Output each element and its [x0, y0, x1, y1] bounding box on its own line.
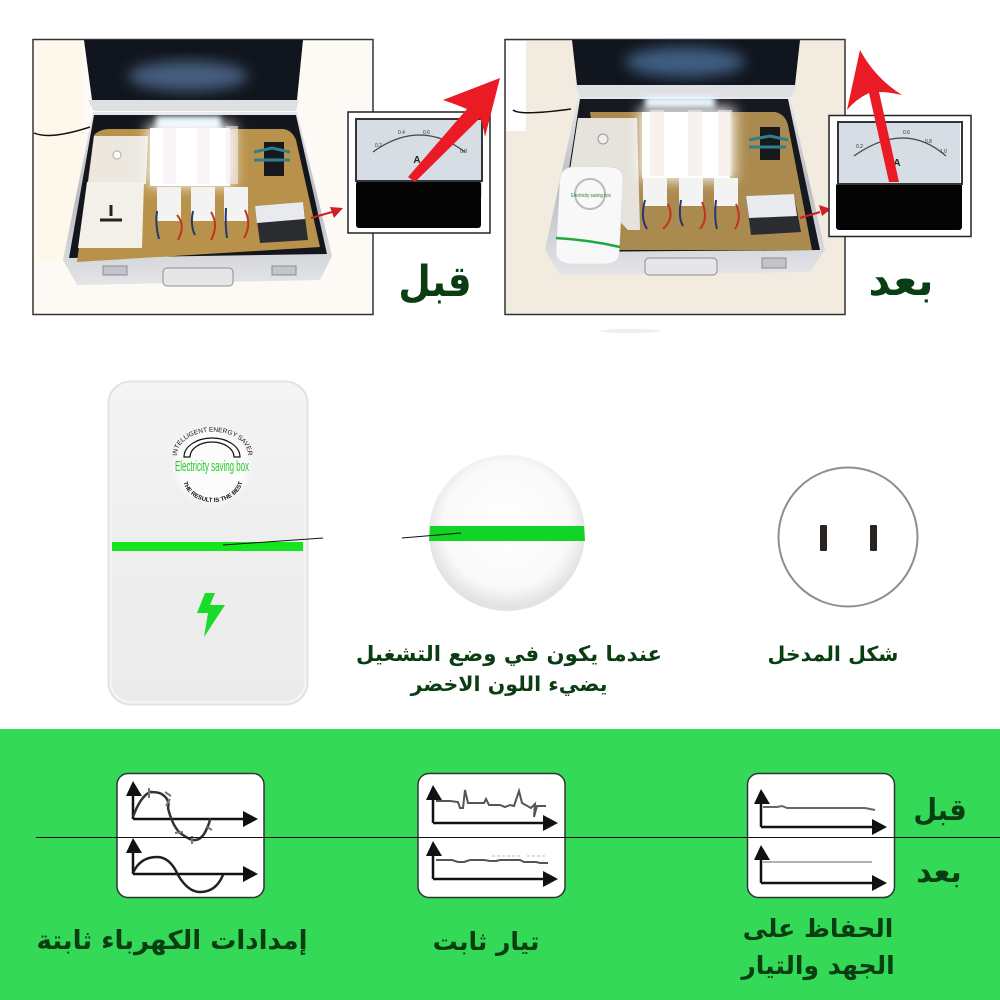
after: white energy saver on case [556, 166, 623, 264]
panel: after ammeter zoom: 0.2 [856, 144, 863, 150]
text: maintaining voltage and current: الحفاظ على [743, 914, 893, 943]
panel: after ammeter zoom: 1.0 [940, 149, 947, 155]
smudge below photos [600, 329, 660, 333]
icon: light close-up circle [402, 455, 585, 611]
panel: after ammeter zoom: 0.6 [903, 130, 910, 136]
panel: before ammeter zoom: 0.2 [375, 143, 382, 149]
text: maintaining voltage and current [739, 914, 895, 981]
before: terminal block [254, 142, 290, 176]
device logo [172, 427, 252, 502]
before: small ammeter [255, 202, 308, 243]
label: after row: بعد [916, 855, 962, 890]
before: wall socket [78, 182, 144, 248]
arrow: before big red arrow [408, 78, 500, 182]
panel: before ammeter zoom: 0.8 [460, 149, 467, 155]
before: glowing lamps [148, 124, 238, 186]
panel: before ammeter zoom: 0.4 [398, 130, 405, 136]
device logo: INTELLIGENT ENERGY SAVER [172, 427, 252, 456]
before: wall switch box [88, 136, 148, 184]
text: stable power supply: إمدادات الكهرباء ثابتة [36, 926, 308, 956]
after: case handle and latches [645, 258, 786, 275]
after: small red arrow [800, 205, 831, 218]
label: before row: قبل [913, 792, 967, 827]
device: energy saver front view [108, 380, 308, 706]
chart: stable current waveforms [418, 774, 565, 898]
before: lamp holders and wires [156, 187, 248, 240]
arrow: after big red arrow [847, 50, 902, 182]
before: case handle and latches [103, 266, 296, 286]
panel: after ammeter zoom [829, 116, 971, 236]
callout line between device and light close-up [223, 538, 323, 545]
panel: green comparison band [0, 729, 1000, 1000]
after: lamp holders and wires [643, 178, 739, 229]
panel: before ammeter zoom: 0.6 [423, 130, 430, 136]
before: small red arrow [311, 207, 343, 218]
heading: after: بعد [868, 256, 934, 306]
after: white energy saver on case: Electricity saving box [571, 193, 611, 199]
device logo: THE RESULT IS THE BEST [184, 481, 242, 502]
panel: before ammeter zoom [348, 112, 490, 233]
after: terminal block [749, 127, 788, 160]
text: socket label: شكل المدخل [768, 642, 898, 666]
panel: before ammeter zoom: A [413, 155, 421, 166]
icon: socket shape [778, 468, 918, 606]
divider line across charts [36, 836, 1000, 838]
text: maintaining voltage and current: الجهد والتيار [739, 951, 895, 981]
after: small ammeter [746, 194, 801, 235]
chart: power supply waveforms [117, 774, 264, 898]
after: wall switch box [570, 118, 640, 230]
text: light description: يضيء اللون الاخضر [410, 672, 607, 696]
device green light bar [112, 542, 303, 551]
chart: voltage and current waveforms [748, 774, 894, 898]
text: light description [356, 641, 662, 696]
panel: after ammeter zoom: 0.8 [925, 139, 932, 145]
panel: after ammeter zoom: A [893, 158, 901, 169]
panel: before photo of test case [33, 40, 373, 314]
after: glowing lamps [640, 108, 734, 180]
icon: green lightning bolt [197, 593, 225, 637]
device logo: Electricity saving box [175, 458, 249, 475]
heading: before: قبل [398, 257, 472, 307]
panel: after photo of test case [505, 40, 845, 314]
text: light description: عندما يكون في وضع التشغيل [356, 641, 662, 666]
text: stable current: تيار ثابت [433, 927, 539, 956]
